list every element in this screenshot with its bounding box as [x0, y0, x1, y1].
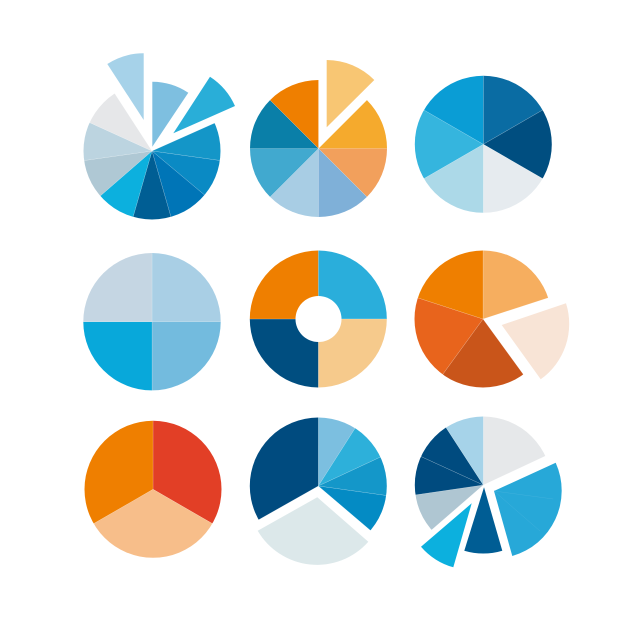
slice: cyan quarter	[318, 250, 387, 319]
slice: navy quarter	[250, 319, 318, 388]
slice: pale blue	[401, 334, 483, 485]
chart: five-slice orange pie with one exploded slice	[414, 250, 570, 388]
slice: exploded pale grey	[258, 497, 368, 565]
slice: burnt orange	[394, 319, 572, 441]
slice: navy upper	[346, 358, 483, 485]
slice: exploded cream	[502, 303, 569, 379]
chart: six-slice blue pie	[414, 76, 552, 213]
slice: pale orange quarter	[318, 318, 387, 388]
donut hole	[296, 296, 342, 342]
slice: exploded cyan	[173, 77, 235, 133]
slice: strong blue	[152, 150, 220, 195]
slice: light orange	[483, 168, 626, 319]
divider: upper line in exploded cyan slice	[494, 491, 553, 499]
slice: pale grey	[484, 144, 542, 213]
slice: periwinkle blue	[318, 148, 367, 217]
slice: sky blue	[318, 335, 399, 486]
slice: exploded dark blue	[464, 487, 502, 553]
chart: ten-slice blue pie with three exploded slices	[84, 53, 235, 220]
wedges: remaining circle	[84, 94, 220, 220]
slice: soft orange	[318, 148, 387, 197]
slice: exploded cyan blue	[494, 463, 562, 556]
slice: exploded bright cyan	[421, 503, 472, 567]
chart: mixed blue pie with three exploded slices	[334, 334, 620, 584]
wedges: remaining circle	[334, 334, 620, 584]
slice: mid blue	[152, 123, 220, 160]
slice: orange	[22, 339, 153, 565]
slice: navy lower	[334, 422, 483, 507]
slice: royal blue	[152, 151, 204, 217]
slice: grey blue quarter	[83, 253, 152, 322]
slice: cyan	[414, 110, 483, 178]
wedges: remaining circle	[250, 80, 387, 217]
slice: strong blue	[318, 486, 468, 584]
wedges: remaining circle	[187, 335, 467, 584]
slice: pale blue quarter	[152, 253, 221, 322]
slice: light grey blue	[84, 122, 152, 160]
slice: amber	[318, 100, 387, 148]
slice: orange	[270, 80, 318, 148]
slice: sky blue quarter	[152, 322, 221, 390]
chart: eight-slice orange and blue pie with one exploded slice	[250, 60, 387, 217]
slice: navy	[187, 335, 318, 560]
slice: mid blue	[318, 422, 468, 507]
slice: red orange	[340, 272, 483, 441]
slice: peach	[22, 489, 284, 565]
slice: exploded pale orange	[327, 60, 374, 127]
slice: navy	[484, 110, 552, 178]
chart: four-quarter blue pie	[83, 253, 221, 390]
wedges: remaining circle	[414, 250, 548, 388]
slice: cyan	[318, 359, 455, 486]
slice: orange	[340, 168, 483, 319]
slice: pale blue	[270, 149, 319, 217]
divider: lower line in exploded cyan slice	[494, 491, 540, 531]
slice: bright blue	[424, 76, 484, 144]
slice: grey blue	[84, 151, 152, 196]
slice: exploded sky blue	[152, 82, 188, 147]
slice: grey blue	[334, 485, 483, 584]
slice: pale grey	[90, 94, 152, 151]
slice: bright cyan	[100, 151, 152, 217]
slice: medium blue	[250, 148, 318, 197]
slice: deep blue	[483, 76, 542, 144]
slice: dark blue	[133, 152, 171, 220]
chart: blue pie with large exploded pale slice	[187, 335, 467, 584]
slice: pale aqua	[424, 144, 484, 213]
infographic: nine pie charts	[83, 53, 570, 568]
chart: four-quarter donut	[250, 250, 387, 388]
slice: orange quarter	[250, 250, 318, 320]
slice: red	[153, 339, 284, 565]
slice: exploded pale blue	[107, 53, 144, 120]
slice: bright cyan quarter	[83, 322, 152, 390]
slice: teal blue	[250, 100, 318, 149]
chart: three-slice warm pie	[22, 339, 284, 565]
slice: pale grey	[483, 334, 620, 485]
